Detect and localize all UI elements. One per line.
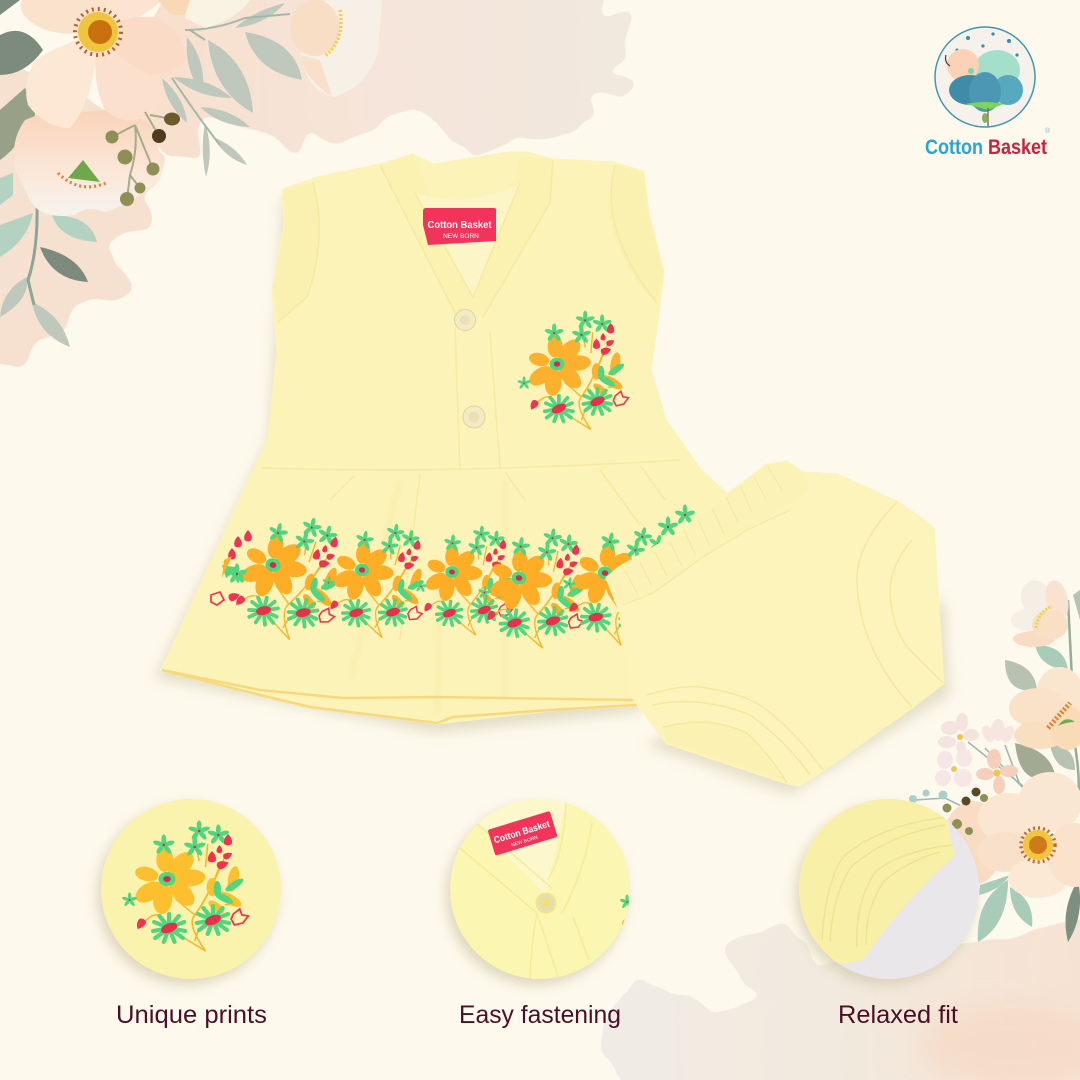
- label: Easy fastening: [459, 1001, 621, 1029]
- leaves: [0, 0, 302, 347]
- watercolor wash: bottom right: [601, 918, 1080, 1080]
- watercolor wash: left: [0, 60, 163, 367]
- dress pleat shading: [350, 480, 505, 715]
- flower with green centre: [14, 110, 161, 216]
- dress photo: [155, 153, 740, 733]
- briefs shadow: [645, 600, 950, 795]
- upper right pale flower: [158, 0, 382, 97]
- briefs side hem: [857, 502, 943, 707]
- logo wordmark: Cotton Basket: [925, 136, 1047, 159]
- circle close-up of print: [101, 799, 281, 979]
- large cream flower: [977, 772, 1080, 898]
- briefs leg hem: [647, 687, 823, 783]
- peach flower behind circle: [943, 801, 1003, 885]
- dress buttons: [454, 310, 485, 428]
- dress label: NEW BORN: [443, 233, 479, 240]
- chest print: [517, 311, 628, 430]
- stems and leaves: [915, 590, 1080, 942]
- peach flower: [1009, 667, 1080, 750]
- dress collar band: [380, 155, 553, 317]
- circle close-up of button placket: [450, 799, 630, 979]
- dress body: [162, 153, 740, 723]
- berries and buds: [909, 788, 988, 835]
- skirt print band: [211, 501, 696, 654]
- briefs body: [607, 462, 943, 785]
- small pink blossoms: [935, 713, 1018, 794]
- dress label: [423, 208, 496, 245]
- close-up button: [536, 894, 556, 912]
- dress shadow: [155, 195, 640, 733]
- circle close-up of leg hem: [799, 799, 979, 979]
- dress seams: [262, 160, 680, 640]
- briefs elastic waistband: [607, 462, 810, 605]
- floral cluster: top left: [0, 0, 382, 347]
- berries: [106, 112, 180, 206]
- close-up label: NEW BORN: [511, 835, 539, 848]
- dress inner neck: [415, 183, 520, 297]
- logo badge: [935, 27, 1035, 127]
- close-up print peek: [620, 894, 630, 908]
- top right flower: [1011, 577, 1072, 647]
- registered mark: ®: [1045, 127, 1051, 135]
- dress hem: [162, 670, 637, 723]
- circle shadow: [446, 805, 626, 985]
- watercolor wash: top: [120, 0, 640, 165]
- dress label: Cotton Basket: [428, 219, 492, 231]
- dress armhole bands: [273, 165, 663, 322]
- feature: relaxed fit: [790, 799, 980, 1023]
- label: Unique prints: [116, 1001, 267, 1029]
- label: Relaxed fit: [838, 1001, 958, 1029]
- briefs photo: [607, 462, 950, 795]
- large peach flower: [21, 0, 185, 128]
- logo: [925, 27, 1051, 159]
- close-up label: Cotton Basket: [493, 819, 552, 846]
- feature: easy fastening: [446, 790, 634, 1029]
- circle shadow: [795, 805, 975, 985]
- feature: unique prints: [97, 799, 281, 1029]
- circle shadow: [97, 805, 277, 985]
- floral cluster: bottom right: [909, 577, 1080, 942]
- close-up label: [488, 811, 558, 856]
